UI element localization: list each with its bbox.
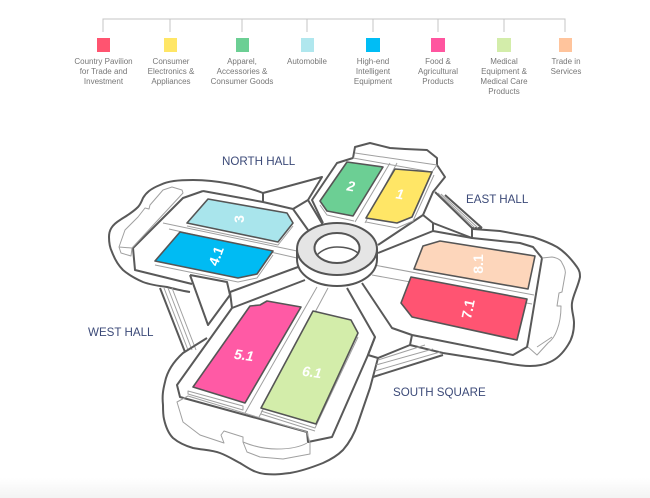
hall 8.1 bbox=[414, 241, 535, 289]
hall 2 bbox=[320, 162, 383, 216]
south hall building bbox=[163, 280, 378, 474]
legend item: Trade in Services: Services bbox=[551, 67, 581, 76]
legend item: Food and Agricultural: Products bbox=[422, 77, 454, 86]
hall 1 bbox=[366, 169, 432, 223]
hall 1: 1 bbox=[395, 185, 405, 203]
legend item: Automobile: Automobile bbox=[287, 57, 328, 66]
legend item: High-end Intelligent Equipment: High-end bbox=[357, 57, 389, 66]
legend item: Country Pavilion: for Trade and bbox=[80, 67, 127, 76]
hall 4.1: 4.1 bbox=[205, 244, 227, 268]
legend item: Food and Agricultural: Food & bbox=[425, 57, 452, 66]
floor plan bbox=[109, 143, 580, 474]
legend item: Country Pavilion bbox=[74, 38, 133, 86]
label: west hall: WEST HALL bbox=[88, 326, 154, 339]
label: east hall: EAST HALL bbox=[466, 193, 529, 206]
central ring bbox=[297, 223, 377, 286]
hall 7.1 bbox=[401, 277, 527, 340]
legend item: Medical Equipment: Medical Care bbox=[480, 77, 528, 86]
west hall building bbox=[109, 177, 323, 352]
legend item: Food and Agricultural bbox=[418, 38, 458, 86]
legend item: Apparel bbox=[211, 38, 273, 86]
legend item: Apparel: Accessories & bbox=[217, 67, 268, 76]
legend item: Medical Equipment: Equipment & bbox=[481, 67, 528, 76]
label: south square: SOUTH SQUARE bbox=[393, 386, 486, 399]
hall 3: 3 bbox=[231, 215, 247, 223]
legend item: Medical Equipment: Products bbox=[488, 87, 520, 96]
hall 8.1: 8.1 bbox=[470, 254, 486, 274]
legend item: Medical Equipment bbox=[480, 38, 528, 96]
legend item: Medical Equipment: Medical bbox=[490, 57, 518, 66]
hall 5.1: 5.1 bbox=[233, 346, 255, 364]
legend item: Consumer Electronics: Appliances bbox=[151, 77, 191, 86]
legend item: Consumer Electronics: Electronics & bbox=[148, 67, 195, 76]
legend item: Food and Agricultural: Agricultural bbox=[418, 67, 458, 76]
hall 5.1 bbox=[193, 301, 301, 403]
legend item: High-end Intelligent Equipment bbox=[354, 38, 393, 86]
hall 6.1: 6.1 bbox=[301, 363, 323, 381]
hall 3 bbox=[187, 199, 293, 245]
legend item: High-end Intelligent Equipment: Equipment bbox=[354, 77, 393, 86]
north hall building bbox=[312, 143, 445, 228]
legend item: Consumer Electronics: Consumer bbox=[153, 57, 190, 66]
hall 7.1: 7.1 bbox=[458, 298, 478, 320]
east hall building bbox=[362, 192, 580, 377]
legend item: Trade in Services: Trade in bbox=[551, 57, 581, 66]
legend item: Apparel: Apparel, bbox=[227, 57, 257, 66]
legend item: Country Pavilion: Investment bbox=[84, 77, 124, 86]
hall 6.1 bbox=[261, 311, 358, 424]
legend item: High-end Intelligent Equipment: Intelligent bbox=[356, 67, 391, 76]
legend bbox=[74, 19, 581, 96]
legend item: Automobile bbox=[287, 38, 328, 66]
legend item: Trade in Services bbox=[551, 38, 581, 76]
legend item: Apparel: Consumer Goods bbox=[211, 77, 273, 86]
legend item: Consumer Electronics bbox=[148, 38, 195, 86]
hall 2: 2 bbox=[345, 177, 356, 195]
legend item: Country Pavilion: Country Pavilion bbox=[74, 57, 133, 66]
label: north hall: NORTH HALL bbox=[222, 155, 296, 168]
hall 4.1 bbox=[155, 232, 273, 282]
